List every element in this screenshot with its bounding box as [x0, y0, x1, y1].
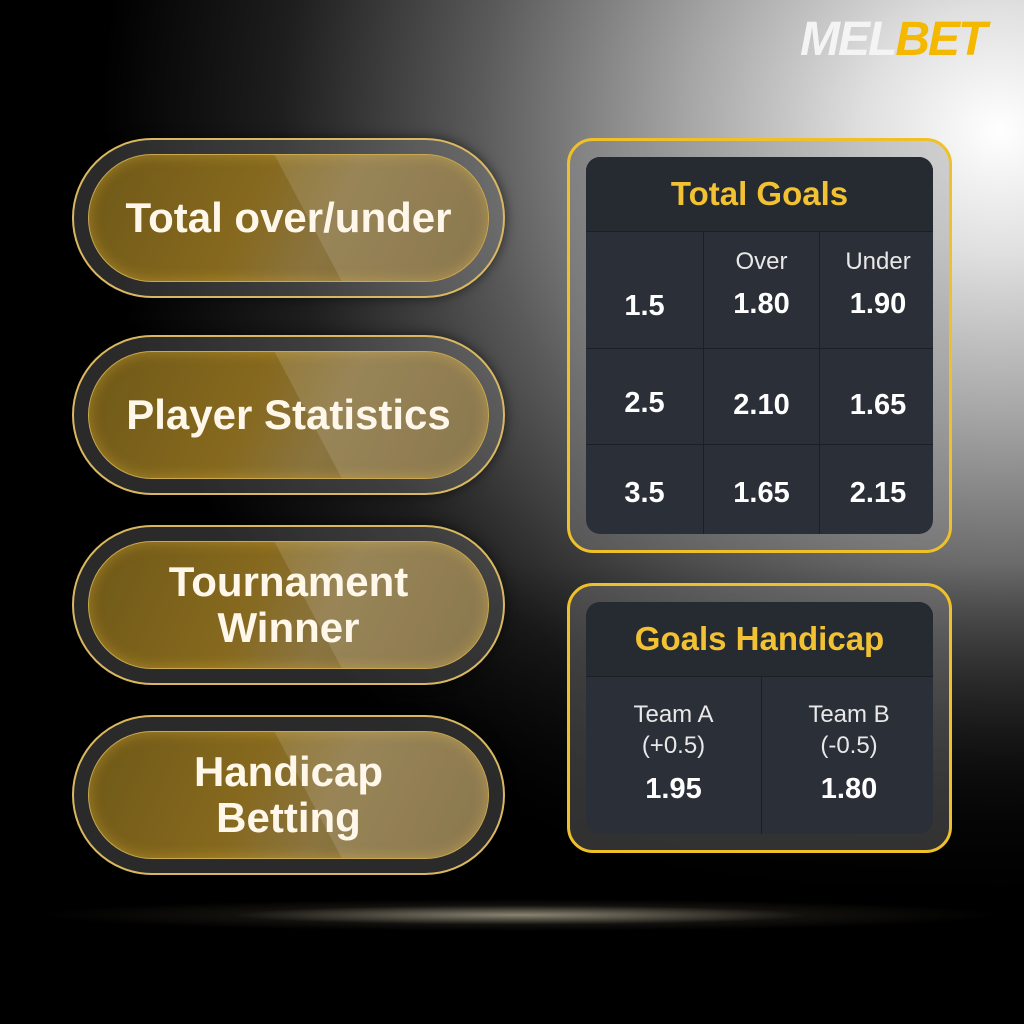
panel: total goals table [567, 138, 952, 553]
panel: total goals table: 2.5 [624, 387, 665, 419]
pill: handicap betting [72, 715, 505, 875]
panel: total goals table: Under [845, 248, 911, 275]
pill: total over/under [72, 138, 505, 298]
heading: total goals [586, 157, 933, 231]
panel: goals handicap: (-0.5) [820, 732, 878, 759]
panel: goals handicap: 1.95 [645, 773, 702, 805]
panel: total goals table: 1.90 [850, 288, 906, 320]
panel: total goals table: Over [735, 248, 788, 275]
panel: goals handicap: 1.80 [821, 773, 877, 805]
panel: total goals table: 1.65 [850, 389, 906, 421]
panel: total goals table: 1.5 [624, 290, 665, 322]
heading: goals handicap [586, 602, 933, 676]
panel: goals handicap: (+0.5) [642, 732, 705, 759]
panel: goals handicap: Team B [808, 701, 890, 728]
panel: total goals table: 3.5 [624, 477, 665, 509]
panel: goals handicap [567, 583, 952, 853]
pill: player statistics [72, 335, 505, 495]
pill: tournament winner: Winner [218, 604, 359, 651]
panel: total goals table: 1.80 [733, 288, 790, 320]
pill: tournament winner [72, 525, 505, 685]
heading: goals handicap: Goals Handicap [635, 620, 884, 657]
panel: total goals table: 1.65 [733, 477, 790, 509]
pill: tournament winner: Tournament [169, 558, 408, 605]
panel: total goals table: 2.10 [733, 389, 790, 421]
heading: total goals: Total Goals [671, 175, 848, 212]
pill: handicap betting: Handicap [194, 748, 383, 795]
panel: goals handicap: Team A [633, 701, 714, 728]
pill: player statistics: Player Statistics [126, 391, 451, 438]
logo: MELBET [800, 13, 985, 66]
pill: handicap betting: Betting [216, 794, 361, 841]
panel: total goals table: 2.15 [850, 477, 906, 509]
pill: total over/under: Total over/under [126, 194, 451, 241]
